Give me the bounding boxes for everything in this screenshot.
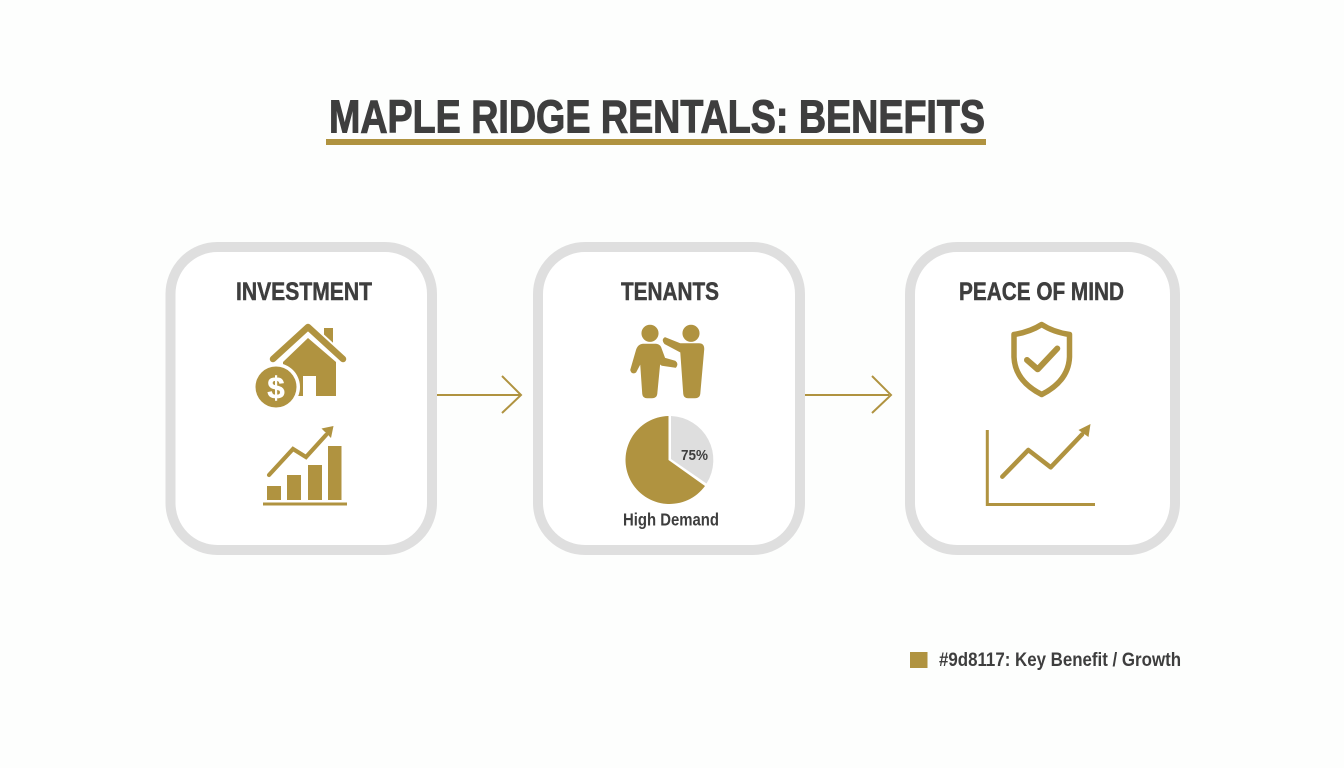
chart: growth line bbox=[987, 424, 1095, 504]
arrow: tenants to peace of mind bbox=[805, 376, 891, 413]
legend: #9d8117: Key Benefit / Growth bbox=[939, 650, 1181, 671]
icon: house with dollar coin bbox=[252, 327, 343, 411]
chart: pie 75% high demand: 75% bbox=[681, 447, 708, 464]
panel: tenants bbox=[538, 247, 800, 550]
icon: growth bar chart bbox=[263, 426, 347, 506]
label: high demand: High Demand bbox=[623, 510, 719, 530]
heading: tenants: TENANTS bbox=[621, 278, 719, 306]
chart: pie 75% high demand bbox=[626, 416, 713, 504]
icon: house with dollar coin: $ bbox=[267, 370, 285, 405]
heading: peace of mind: PEACE OF MIND bbox=[959, 278, 1124, 306]
arrow: investment to tenants bbox=[437, 376, 521, 413]
icon: two people bbox=[631, 326, 704, 398]
panel: investment bbox=[170, 247, 432, 550]
title: MAPLE RIDGE RENTALS: BENEFITS bbox=[329, 90, 985, 142]
heading: investment: INVESTMENT bbox=[236, 278, 372, 306]
panel: peace of mind bbox=[910, 247, 1175, 550]
icon: shield with check bbox=[1014, 324, 1070, 394]
